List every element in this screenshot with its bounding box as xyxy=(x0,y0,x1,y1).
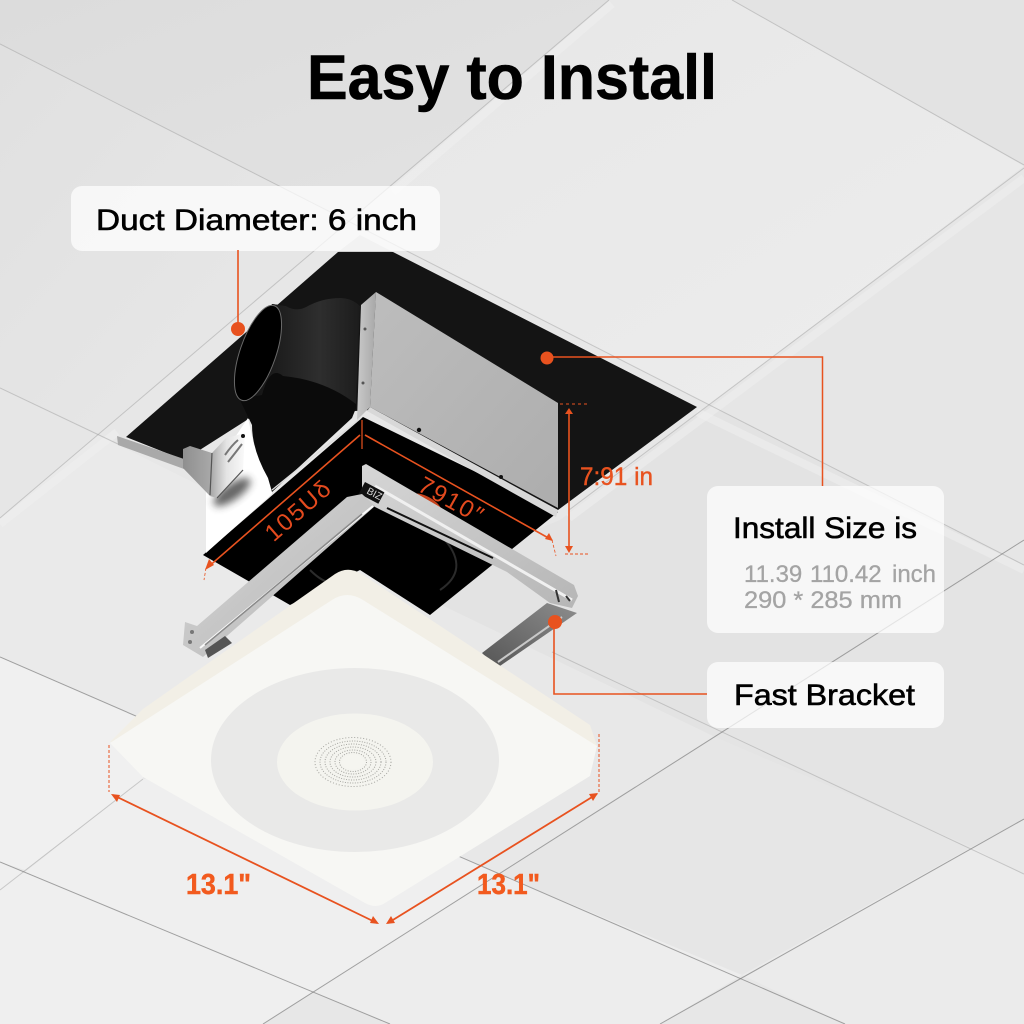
dimension: housing height: 7:91 in xyxy=(580,463,653,491)
callout: install size: Install Size is xyxy=(733,512,917,545)
callout: duct diameter xyxy=(71,186,440,252)
lower black cavity xyxy=(203,417,558,615)
dimension: housing depth xyxy=(204,435,360,580)
dimension: panel left edge: 13.1" xyxy=(186,869,251,901)
plate shadow xyxy=(209,473,255,511)
leader: install size xyxy=(540,352,822,486)
fast bracket right rail: BIZ xyxy=(365,486,383,503)
fast bracket right rail xyxy=(359,464,578,608)
callout: fast bracket xyxy=(707,662,944,728)
speaker mesh xyxy=(315,738,391,786)
callout: duct diameter: Duct Diameter: 6 inch xyxy=(96,204,417,237)
inner disc xyxy=(277,714,433,810)
callout: install size: 290 * 285 mm xyxy=(744,587,902,614)
dimension: panel left edge xyxy=(109,745,379,924)
title: Easy to Install xyxy=(307,43,717,113)
panel face xyxy=(110,595,597,906)
callout: install size: 110.42 xyxy=(810,561,882,588)
housing metal face xyxy=(367,292,558,517)
leader: duct diameter xyxy=(231,250,245,336)
callout: install size: inch xyxy=(892,561,936,588)
dimension: housing height xyxy=(560,404,653,554)
callout: install size xyxy=(707,486,944,633)
white mounting plate xyxy=(206,418,272,553)
dimension: housing width xyxy=(362,420,556,556)
duct collar xyxy=(225,298,360,492)
dimension: panel right edge xyxy=(386,734,599,924)
dimension: housing width: 7910″ xyxy=(413,472,488,529)
orange reflection xyxy=(410,490,444,516)
callout: install size: 11.39 xyxy=(744,561,802,588)
fan wheel detail xyxy=(310,540,456,590)
mounting bracket xyxy=(183,433,245,498)
panel cream rim xyxy=(110,570,597,746)
silver ceiling rail xyxy=(117,436,184,469)
fast bracket left rail xyxy=(183,494,375,658)
leader: fast bracket xyxy=(548,615,707,694)
dimension: housing depth: 105Uδ xyxy=(260,476,336,547)
outer ring xyxy=(211,668,499,852)
fast bracket back rail xyxy=(482,603,577,668)
product illustration: exhaust fan housing xyxy=(117,252,697,668)
callout: fast bracket: Fast Bracket xyxy=(734,679,916,712)
dimension: panel right edge: 13.1" xyxy=(477,869,540,901)
ceiling fan grille panel xyxy=(110,570,597,906)
ceiling opening xyxy=(126,252,697,510)
housing side flange xyxy=(357,292,376,420)
